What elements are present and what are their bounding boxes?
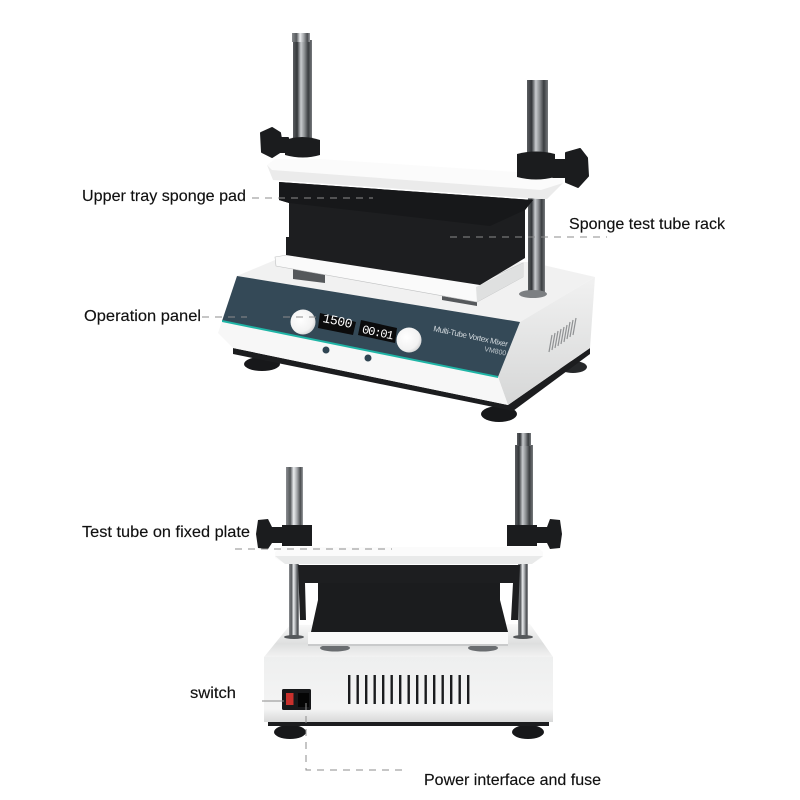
post rings [284,635,533,639]
operation panel [222,276,520,377]
post upper left [293,40,312,138]
foot: rear left [274,725,306,739]
display time: 00:01 [361,323,395,343]
vent: rear slots [348,675,469,704]
collar left [285,137,320,158]
foot: rear right [512,725,544,739]
lower post right [518,563,528,637]
button left [322,346,330,354]
post holes [320,644,498,652]
tray spring mount left [293,268,325,283]
power socket [298,693,309,707]
plate front shade [275,556,543,564]
base rear face [264,657,553,722]
label: power interface and fuse: Power interface and fuse [424,772,601,789]
sponge test tube rack [279,182,533,285]
foot: front [481,406,517,422]
dial left [290,310,316,334]
panel model: VM800 [484,346,507,358]
lower tray [275,255,523,302]
label: switch [190,685,284,702]
knob left [261,128,288,157]
upper tray plate [267,159,563,199]
label: test tube on fixed plate: Test tube on fixed plate [82,524,250,541]
label: operation panel: Operation panel [84,308,201,325]
upper plate [275,547,543,564]
rocker switch [286,693,294,705]
lower tray [308,632,508,645]
knob right [553,149,588,187]
plate front edge [267,165,563,199]
post cap left [292,33,310,42]
sponge rack [311,583,508,632]
dial right [396,328,422,352]
collar right [507,525,537,546]
knob left [256,519,282,549]
post tip right [517,433,531,446]
collar right [517,152,555,180]
base front white strip [218,321,508,405]
base top surface [264,624,553,657]
post upper right [527,80,548,154]
base black underside [268,722,549,726]
label: upper tray sponge pad: Upper tray sponge pad [82,188,246,205]
base top surface [237,260,595,322]
label: sponge test tube rack: Sponge test tube rack [569,216,726,233]
label: power interface and fuse [306,703,601,789]
upper tray sponge pad shade [279,182,533,226]
knob right [537,519,562,549]
post lower right [528,197,545,294]
base black underside [233,348,590,411]
panel product name: Multi-Tube Vortex Mixer [433,324,509,349]
upper post left [286,467,303,527]
power switch and socket module [282,689,311,710]
label: switch: switch [190,685,236,702]
display speed: 1500 [321,311,354,332]
teal stripe [222,320,498,378]
upper sponge with side rails [298,565,520,620]
tray front edge shade [476,263,523,302]
button right [364,354,372,362]
tray underside shade [308,644,508,646]
collar left [282,525,312,546]
post base ring [519,290,547,298]
vent: side slots [549,318,576,352]
foot: right [559,361,587,373]
lower device: vortex mixer rear view [256,433,562,739]
base right side [498,277,595,405]
upper post right [515,445,533,527]
tray spring mount right [442,296,477,306]
upper device: vortex mixer front view [218,33,595,422]
foot: left [244,357,280,371]
lower post left [289,563,299,637]
